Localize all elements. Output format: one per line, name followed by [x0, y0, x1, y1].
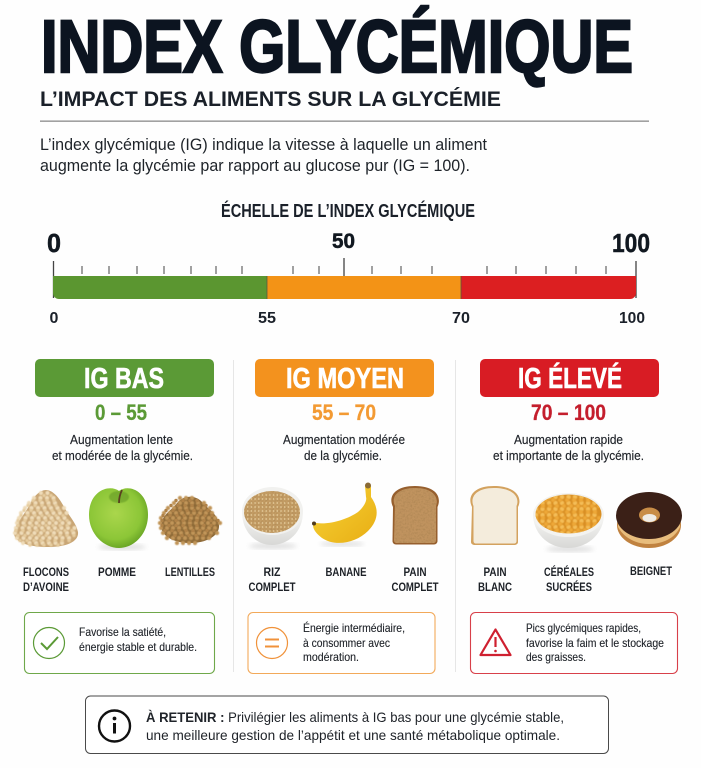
food labels: COMPLET [248, 582, 296, 594]
banner: IG élevé: IG ÉLEVÉ [518, 363, 622, 395]
food labels [478, 566, 672, 594]
callout: élevé: Pics glycémiques rapides, [526, 621, 641, 635]
scale heading: ÉCHELLE DE L’INDEX GLYCÉMIQUE [221, 200, 475, 221]
callout: bas: Favorise la satiété, [79, 625, 166, 639]
banner: IG bas: IG BAS [84, 363, 164, 395]
banner: IG bas [35, 359, 214, 397]
icon: info [99, 710, 130, 742]
food: banane [312, 482, 377, 546]
food labels: RIZ [264, 567, 280, 579]
food labels: BEIGNET [630, 566, 672, 578]
description [283, 432, 405, 463]
scale bottom numbers: 55 [258, 310, 276, 327]
scale top numbers: 0 [47, 228, 61, 258]
description: Augmentation lente [70, 432, 173, 447]
food: riz complet [242, 487, 303, 549]
scale top numbers: 50 [332, 230, 355, 253]
callout: élevé [470, 612, 678, 674]
banner: IG élevé [480, 359, 659, 397]
scale ticks [54, 258, 636, 298]
scale top numbers [47, 228, 650, 258]
scale bottom numbers [50, 310, 645, 327]
icon: equals [256, 628, 288, 658]
scale top numbers: 100 [612, 228, 650, 258]
intro text [40, 135, 487, 175]
callout: moyen: Énergie intermédiaire, [303, 620, 405, 635]
range: 0–55: 0 – 55 [95, 400, 147, 425]
description: et importante de la glycémie. [493, 448, 644, 463]
food labels: BANANE [326, 567, 367, 579]
glycemic index scale [47, 228, 650, 327]
food: pain blanc [470, 486, 519, 545]
callout: moyen [248, 612, 435, 674]
callout: élevé: favorise la faim et le stockage [526, 636, 664, 650]
food labels: CÉRÉALES [544, 566, 594, 579]
description [493, 432, 644, 463]
food labels: COMPLET [392, 582, 438, 594]
food labels [23, 567, 215, 594]
callout: bas [24, 612, 214, 674]
callout: à retenir [86, 696, 608, 754]
icon: warning [480, 630, 510, 655]
subtitle: L’IMPACT DES ALIMENTS SUR LA GLYCÉMIE [40, 86, 501, 111]
food labels: PAIN [484, 567, 506, 579]
food: pain complet [391, 486, 439, 544]
description: Augmentation rapide [514, 432, 623, 447]
description [52, 432, 193, 463]
panel: IG élevé [470, 359, 682, 674]
food: lentilles [160, 497, 221, 543]
intro text: L’index glycémique (IG) indique la vitesse à laquelle un aliment [40, 135, 487, 154]
food labels [248, 567, 438, 594]
panel: IG bas [14, 359, 221, 674]
takeaway text: À RETENIR : Privilégier les aliments à IG bas pour une glycémie stable, [146, 709, 564, 725]
description: et modérée de la glycémie. [52, 448, 193, 463]
food: flocons d'avoine [14, 490, 78, 547]
description: de la glycémie. [304, 448, 382, 463]
description: Augmentation modérée [283, 432, 405, 447]
food labels: POMME [98, 567, 136, 579]
callout: moyen: modération. [303, 650, 359, 664]
callout: bas: énergie stable et durable. [79, 640, 197, 654]
scale bar [53, 276, 636, 299]
scale bottom numbers: 0 [50, 310, 59, 327]
takeaway text [146, 709, 564, 743]
panel: IG moyen [242, 359, 439, 674]
range: 70–100: 70 – 100 [531, 400, 606, 425]
callout: élevé: des graisses. [526, 650, 586, 664]
range: 55–70: 55 – 70 [312, 400, 376, 425]
banner: IG moyen: IG MOYEN [286, 363, 404, 395]
scale bottom numbers: 100 [619, 310, 645, 327]
banner: IG moyen [255, 359, 434, 397]
scale bottom numbers: 70 [452, 310, 470, 327]
food: pomme [89, 488, 148, 550]
food labels: PAIN [404, 567, 426, 579]
food labels: FLOCONS [23, 567, 69, 579]
callout: moyen: à consommer avec [303, 636, 390, 650]
food labels: D’AVOINE [23, 582, 69, 594]
food labels: LENTILLES [165, 567, 215, 579]
food labels: SUCRÉES [546, 581, 592, 594]
icon: check [34, 628, 64, 658]
food labels: BLANC [478, 582, 512, 594]
intro text: augmente la glycémie par rapport au glucose pur (IG = 100). [40, 156, 470, 175]
food: beignet [616, 492, 682, 548]
takeaway text: une meilleure gestion de l’appétit et une santé métabolique optimale. [146, 727, 560, 743]
food: céréales sucrées [533, 493, 604, 552]
